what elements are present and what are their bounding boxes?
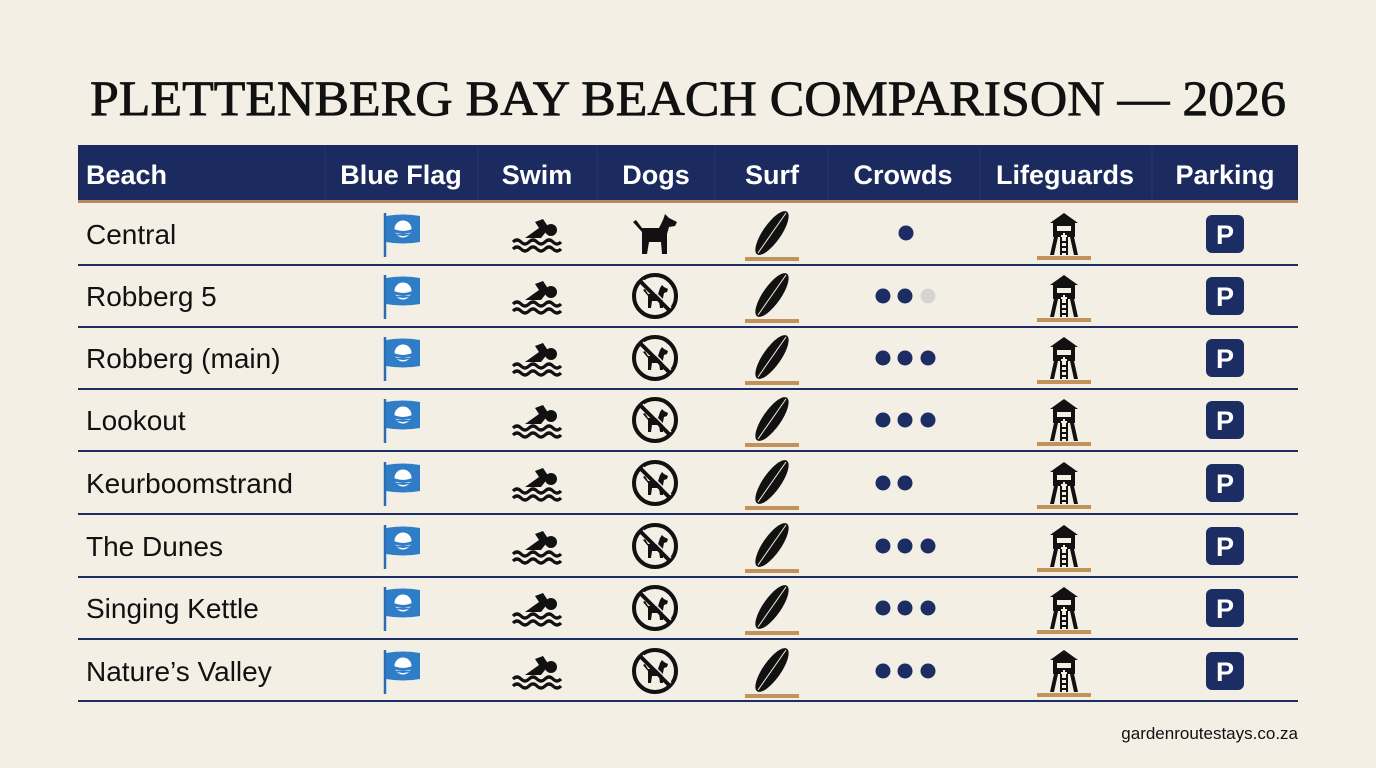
table header: Lifeguards <box>996 160 1134 190</box>
beach names: Keurboomstrand <box>86 468 293 499</box>
table header <box>78 145 1298 203</box>
crowds dots <box>876 226 936 678</box>
table header: Swim <box>502 160 572 190</box>
beach names: Nature’s Valley <box>86 656 272 687</box>
table header: Beach <box>86 160 167 190</box>
table header: Crowds <box>853 160 953 190</box>
icons: lifeguards column <box>1037 213 1091 697</box>
table header: Parking <box>1175 160 1275 190</box>
icons: surf column <box>745 207 799 698</box>
row dividers <box>78 264 1298 702</box>
footer url: gardenroutestays.co.za <box>1121 724 1299 743</box>
beach names: Robberg (main) <box>86 343 281 374</box>
beach names: Robberg 5 <box>86 281 217 312</box>
icons: blue flag column <box>385 213 420 694</box>
icons: parking column <box>1206 215 1244 690</box>
beach names: Lookout <box>86 405 186 436</box>
table header: Surf <box>745 160 800 190</box>
beach names: Singing Kettle <box>86 593 259 624</box>
title: PLETTENBERG BAY BEACH COMPARISON — 2026 <box>90 70 1286 126</box>
beach names: The Dunes <box>86 531 223 562</box>
table header: Blue Flag <box>340 160 462 190</box>
beach names <box>86 219 293 687</box>
icons: swim column <box>513 219 561 688</box>
beach names: Central <box>86 219 176 250</box>
table header: Dogs <box>622 160 690 190</box>
icons: dogs column <box>633 214 677 692</box>
